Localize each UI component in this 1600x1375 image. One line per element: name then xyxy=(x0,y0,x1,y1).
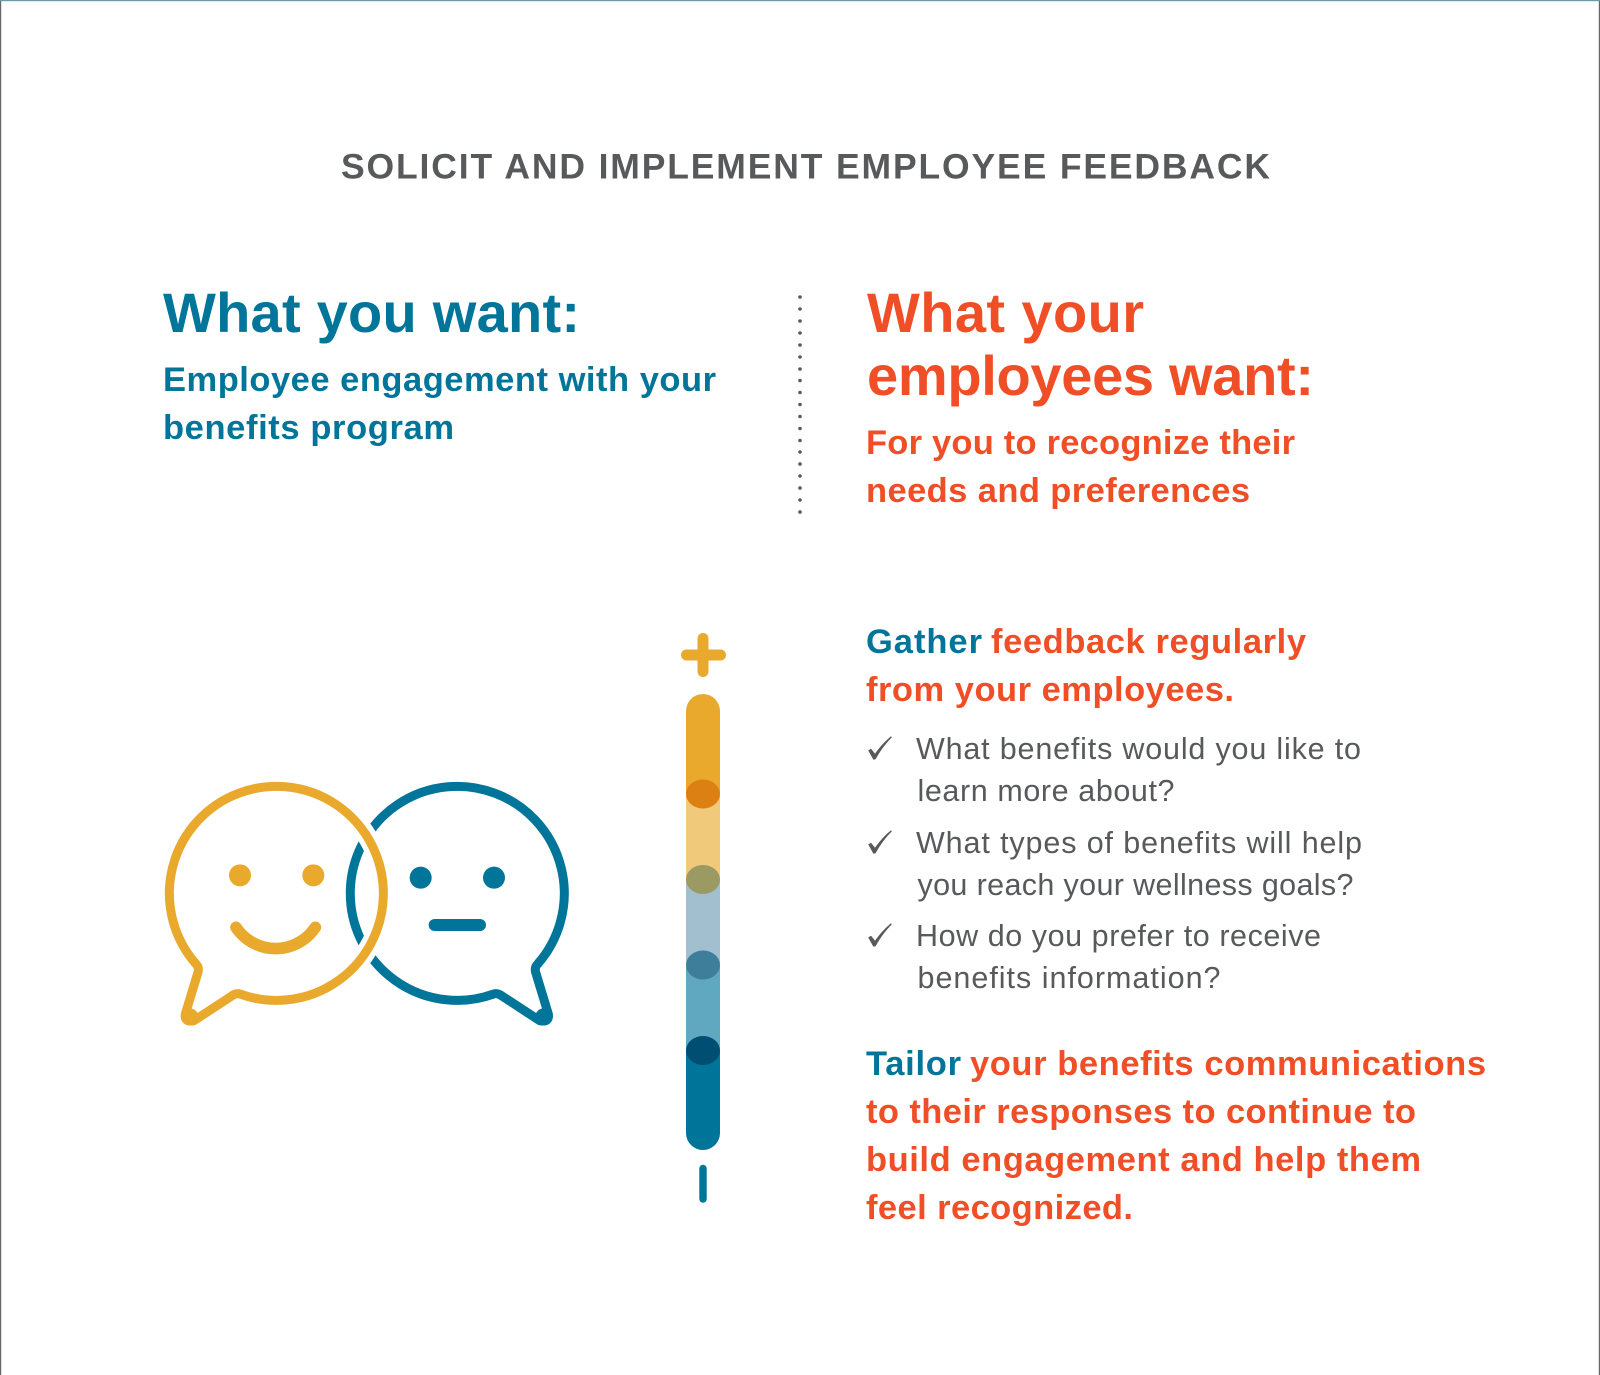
dotted divider xyxy=(798,295,802,514)
icon: overlapping speech bubbles xyxy=(169,786,564,1025)
question 1: learn more about? xyxy=(918,774,1174,808)
chart: feedback scale bar xyxy=(686,638,720,1199)
icon: smiling face bubble xyxy=(169,786,383,1025)
heading: what your employees want: What your xyxy=(867,281,1144,344)
panel: tailor communications xyxy=(866,1045,1486,1227)
list: feedback questions xyxy=(868,732,1362,995)
question 1 xyxy=(868,732,1361,808)
heading: gather feedback: Gather xyxy=(866,623,982,661)
heading: what your employees want: employees want: xyxy=(867,344,1314,407)
heading: what your employees want xyxy=(867,281,1314,407)
text: employer goal: benefits program xyxy=(163,409,454,447)
question 3 xyxy=(868,919,1321,995)
panel: tailor communications: build engagement and help them xyxy=(866,1141,1421,1179)
panel: tailor communications: to their responses to continue to xyxy=(866,1093,1416,1131)
text: employer goal xyxy=(163,361,716,447)
text: employee goal xyxy=(866,424,1295,510)
text: employer goal: Employee engagement with your xyxy=(163,361,716,399)
icon: plus xyxy=(686,638,720,672)
panel: what you want xyxy=(163,281,716,447)
question 2 xyxy=(868,826,1362,902)
question 2: What types of benefits will help xyxy=(916,826,1362,860)
panel: tailor communications: Tailor xyxy=(866,1045,961,1083)
question 3: benefits information? xyxy=(918,961,1220,995)
icon: neutral face bubble xyxy=(169,786,564,1025)
text: employee goal: For you to recognize their xyxy=(866,424,1295,462)
heading: gather feedback xyxy=(866,623,1306,709)
panel: tailor communications: feel recognized. xyxy=(866,1189,1133,1227)
question 1: What benefits would you like to xyxy=(916,732,1361,766)
title: SOLICIT AND IMPLEMENT EMPLOYEE FEEDBACK xyxy=(341,146,1270,186)
text: employee goal: needs and preferences xyxy=(866,472,1250,510)
heading: gather feedback: from your employees. xyxy=(866,671,1234,709)
heading: gather feedback: feedback regularly xyxy=(991,623,1306,661)
panel: what your employees want xyxy=(866,281,1314,510)
question 2: you reach your wellness goals? xyxy=(918,868,1354,902)
question 3: How do you prefer to receive xyxy=(916,919,1321,953)
panel: gather feedback xyxy=(866,623,1362,995)
heading: what you want: What you want: xyxy=(163,281,580,344)
icon: minus xyxy=(699,1168,707,1199)
scale segments xyxy=(686,694,720,1150)
panel: tailor communications: your benefits communications xyxy=(970,1045,1486,1083)
